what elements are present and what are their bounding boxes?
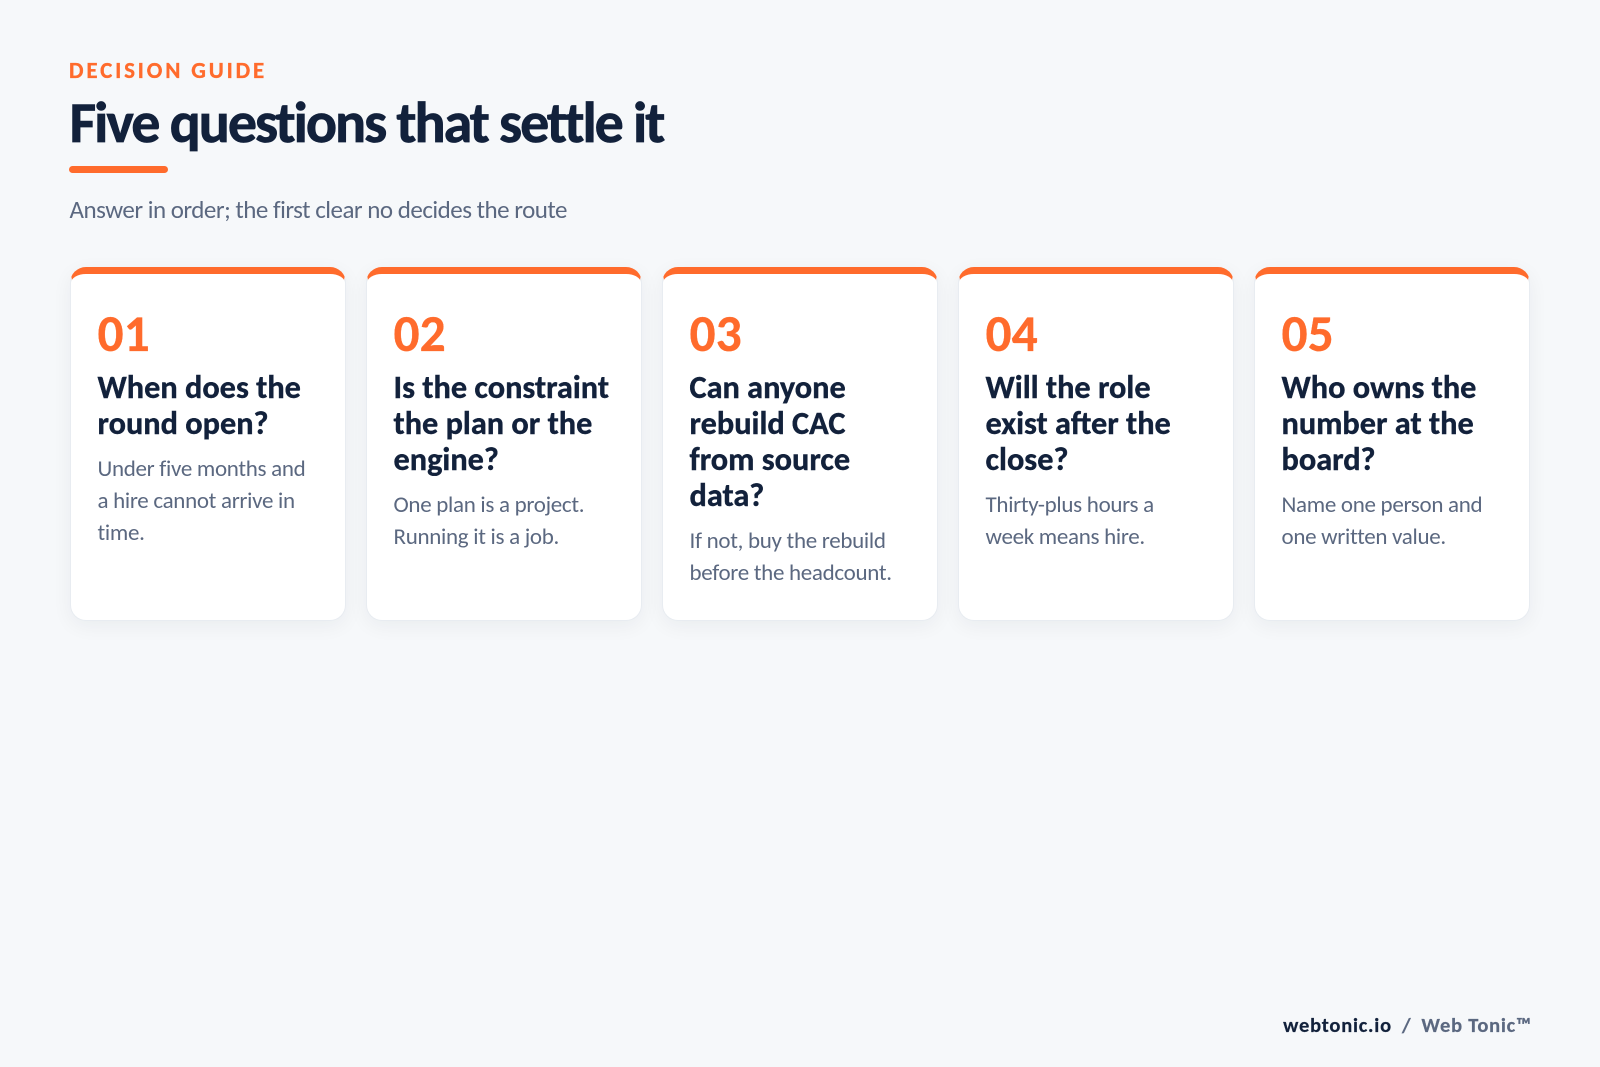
question 01 description: Under five months and [98, 455, 305, 483]
question 03 heading [690, 366, 850, 514]
question 01 heading [97, 366, 301, 442]
title accent rule [69, 166, 168, 173]
panel: question 02 [366, 267, 642, 621]
question 03 description: If not, buy the rebuild [690, 527, 886, 555]
panel: question 01 [70, 267, 346, 621]
number 04: 04 [986, 302, 1038, 365]
number 01: 01 [98, 302, 150, 365]
question 04 description: week means hire. [986, 523, 1145, 551]
question 02 heading [394, 366, 609, 478]
question 03 heading: Can anyone [690, 366, 846, 406]
question 01 description: a hire cannot arrive in [98, 487, 295, 515]
panel: question 04 [958, 267, 1234, 621]
question 04 heading [985, 366, 1171, 478]
question 04 heading: exist after the [986, 402, 1171, 442]
number 05: 05 [1282, 302, 1334, 365]
eyebrow label: DECISION GUIDE [69, 57, 267, 85]
question 03 heading: from source [690, 438, 850, 478]
question 05 description: Name one person and [1282, 491, 1482, 519]
question 02 description [394, 491, 584, 551]
title: Five questions that settle it [70, 87, 663, 158]
question 05 heading: Who owns the [1282, 366, 1476, 406]
question 05 description: one written value. [1282, 523, 1446, 551]
question 04 description [986, 491, 1154, 551]
question 03 description [690, 527, 892, 587]
subtitle: Answer in order; the first clear no decides the route [70, 194, 567, 225]
number 03: 03 [690, 302, 742, 365]
question 02 heading: engine? [394, 438, 499, 478]
question 05 heading [1281, 366, 1476, 478]
question 01 heading: round open? [98, 402, 268, 442]
question 03 heading: data? [690, 474, 764, 514]
question 05 description [1282, 491, 1482, 551]
footer brand: webtonic.io / Web Tonic™ [1283, 1012, 1532, 1038]
question 01 heading: When does the [98, 366, 301, 406]
question 02 heading: the plan or the [394, 402, 592, 442]
question 03 heading: rebuild CAC [690, 402, 845, 442]
question 04 heading: Will the role [986, 366, 1151, 406]
question 05 heading: number at the [1282, 402, 1474, 442]
question 02 description: One plan is a project. [394, 491, 584, 519]
question 04 heading: close? [986, 438, 1068, 478]
question 02 description: Running it is a job. [394, 523, 559, 551]
panel: question 05 [1254, 267, 1530, 621]
number 02: 02 [394, 302, 446, 365]
question 03 description: before the headcount. [690, 559, 892, 587]
panel: question 03 [662, 267, 938, 621]
question 02 heading: Is the constraint [394, 366, 609, 406]
question 01 description [98, 455, 305, 547]
question 01 description: time. [98, 519, 145, 547]
question 04 description: Thirty-plus hours a [986, 491, 1154, 519]
question 05 heading: board? [1282, 438, 1376, 478]
